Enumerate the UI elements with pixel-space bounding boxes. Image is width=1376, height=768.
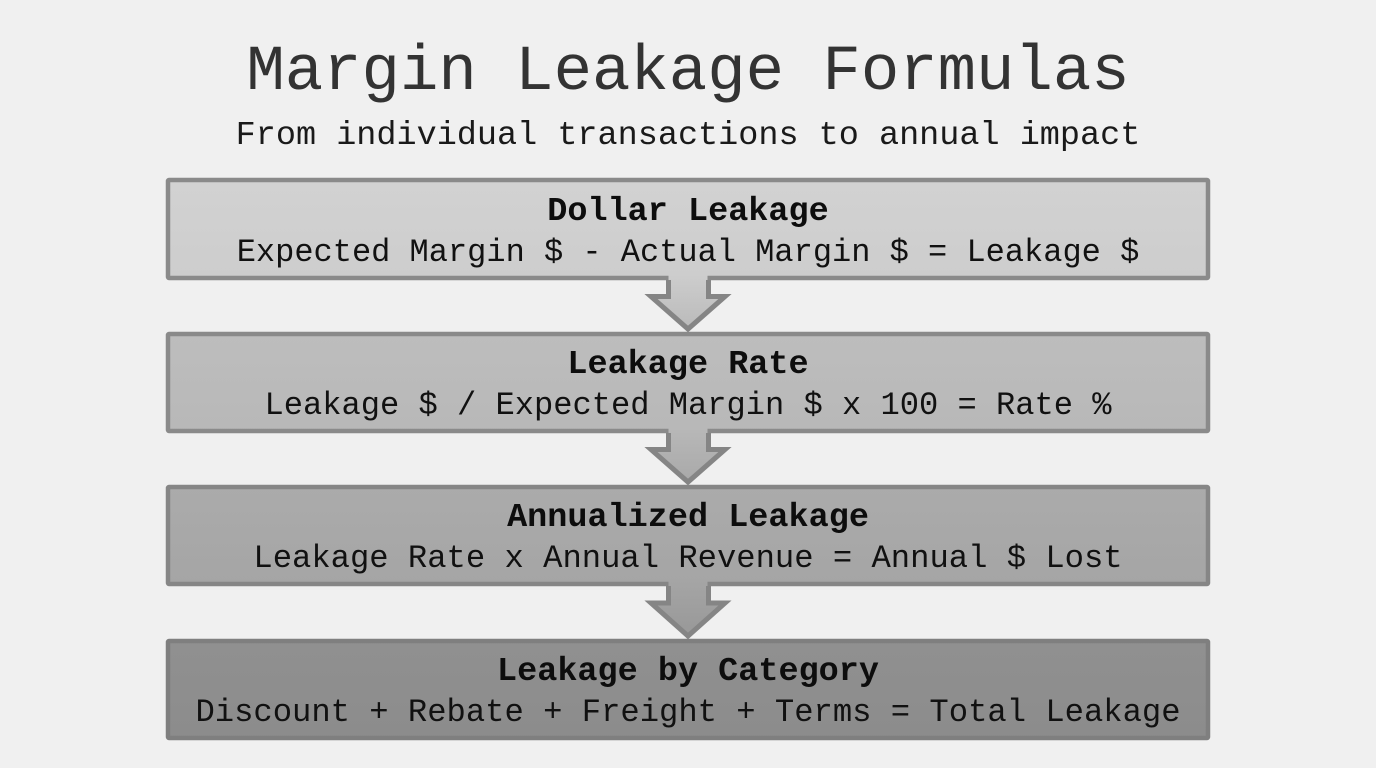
formula: leakage rate: Leakage $ / Expected Margin $ x 100 = Rate % xyxy=(264,387,1112,424)
title: Margin Leakage Formulas xyxy=(246,37,1130,109)
heading: leakage rate: Leakage Rate xyxy=(567,346,809,384)
panel: annualized leakage xyxy=(168,487,1208,584)
panel: leakage rate xyxy=(168,334,1208,431)
subtitle: From individual transactions to annual impact xyxy=(236,117,1140,155)
heading: dollar leakage: Dollar Leakage xyxy=(547,193,829,231)
arrow: leakage rate to annualized leakage xyxy=(651,428,725,482)
formula: dollar leakage: Expected Margin $ - Actual Margin $ = Leakage $ xyxy=(237,234,1139,271)
heading: leakage by category: Leakage by Category xyxy=(497,653,879,691)
panel: leakage by category xyxy=(168,641,1208,738)
arrow: annualized leakage to leakage by category xyxy=(651,581,725,636)
panel: dollar leakage xyxy=(168,180,1208,278)
arrow: dollar leakage to leakage rate xyxy=(651,275,725,329)
heading: annualized leakage: Annualized Leakage xyxy=(507,499,869,537)
formula: leakage by category: Discount + Rebate + Freight + Terms = Total Leakage xyxy=(195,694,1181,731)
formula: annualized leakage: Leakage Rate x Annual Revenue = Annual $ Lost xyxy=(253,540,1123,577)
